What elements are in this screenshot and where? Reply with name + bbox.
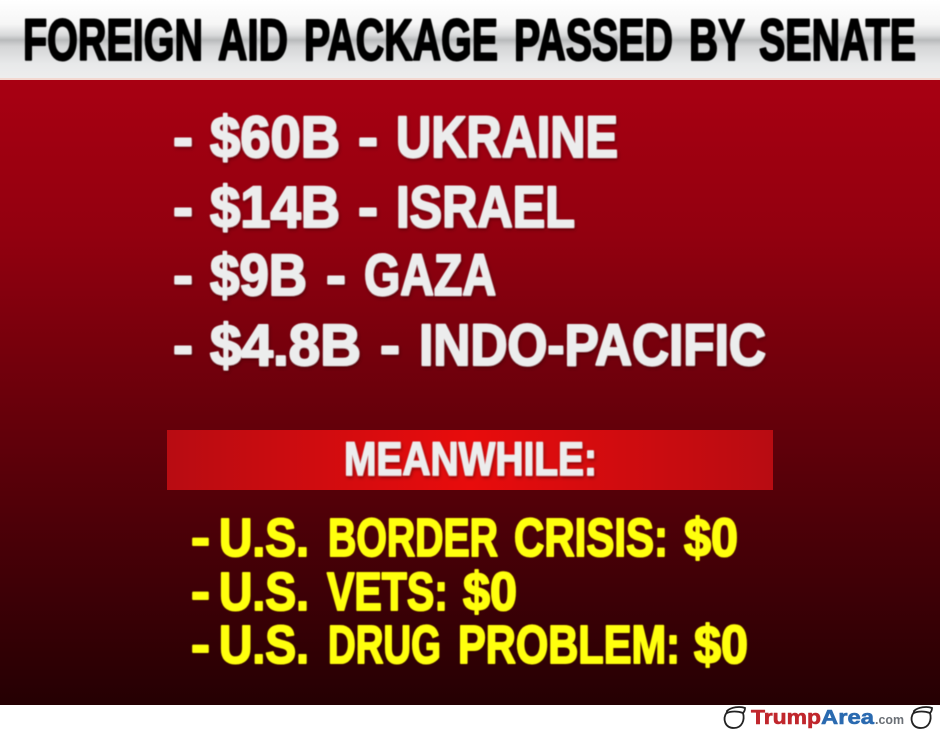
title: BY: [689, 8, 745, 73]
title: [23, 8, 916, 73]
line: Israel: [173, 175, 575, 240]
line: border crisis: [191, 508, 738, 568]
logo wordmark: Trump: [751, 707, 821, 729]
line: drug problem: DRUG: [328, 615, 441, 675]
line: vets: VETS:: [327, 562, 448, 622]
line: drug problem: [191, 615, 748, 675]
watermark logo: [725, 707, 932, 729]
title: AID: [218, 8, 288, 73]
line: Israel: ISRAEL: [396, 175, 575, 240]
title: PACKAGE: [304, 8, 498, 73]
line: Indo-Pacific: [173, 313, 766, 378]
line: drug problem: PROBLEM:: [458, 615, 680, 675]
line: Indo-Pacific: -: [380, 313, 400, 378]
line: drug problem: -: [191, 615, 210, 675]
line: drug problem: U.S.: [219, 615, 309, 675]
domestic funding list: [191, 508, 748, 675]
line: Indo-Pacific: -: [173, 313, 193, 378]
line: Ukraine: -: [173, 105, 193, 170]
line: Gaza: $9B: [210, 243, 307, 308]
line: Ukraine: $60B: [210, 105, 340, 170]
line: vets: -: [191, 562, 210, 622]
line: border crisis: CRISIS:: [514, 508, 668, 568]
header banner: [0, 0, 940, 80]
logo suffix: .com: [875, 712, 904, 727]
line: vets: $0: [463, 562, 517, 622]
line: Gaza: [173, 243, 496, 308]
line: border crisis: BORDER: [328, 508, 498, 568]
line: Israel: -: [358, 175, 378, 240]
line: Ukraine: UKRAINE: [396, 105, 618, 170]
title: PASSED: [514, 8, 673, 73]
line: vets: U.S.: [219, 562, 309, 622]
line: border crisis: $0: [684, 508, 738, 568]
line: Ukraine: -: [358, 105, 378, 170]
line: Israel: $14B: [210, 175, 340, 240]
logo wordmark: Area: [821, 707, 875, 729]
aid amounts list: [173, 105, 766, 378]
line: Gaza: -: [173, 243, 193, 308]
line: border crisis: -: [191, 508, 210, 568]
icon: hat left: [725, 707, 745, 728]
line: Gaza: GAZA: [364, 243, 496, 308]
title: FOREIGN: [23, 8, 203, 73]
line: Ukraine: [173, 105, 618, 170]
logo wordmark: [751, 707, 875, 729]
line: Indo-Pacific: INDO-PACIFIC: [419, 313, 766, 378]
meanwhile bar: MEANWHILE:: [344, 432, 597, 485]
line: Indo-Pacific: $4.8B: [210, 313, 361, 378]
line: border crisis: U.S.: [219, 508, 309, 568]
line: Gaza: -: [326, 243, 346, 308]
line: vets: [191, 562, 517, 622]
meanwhile bar: [167, 430, 773, 490]
line: drug problem: $0: [694, 615, 748, 675]
line: Israel: -: [173, 175, 193, 240]
icon: hat right: [912, 707, 932, 728]
